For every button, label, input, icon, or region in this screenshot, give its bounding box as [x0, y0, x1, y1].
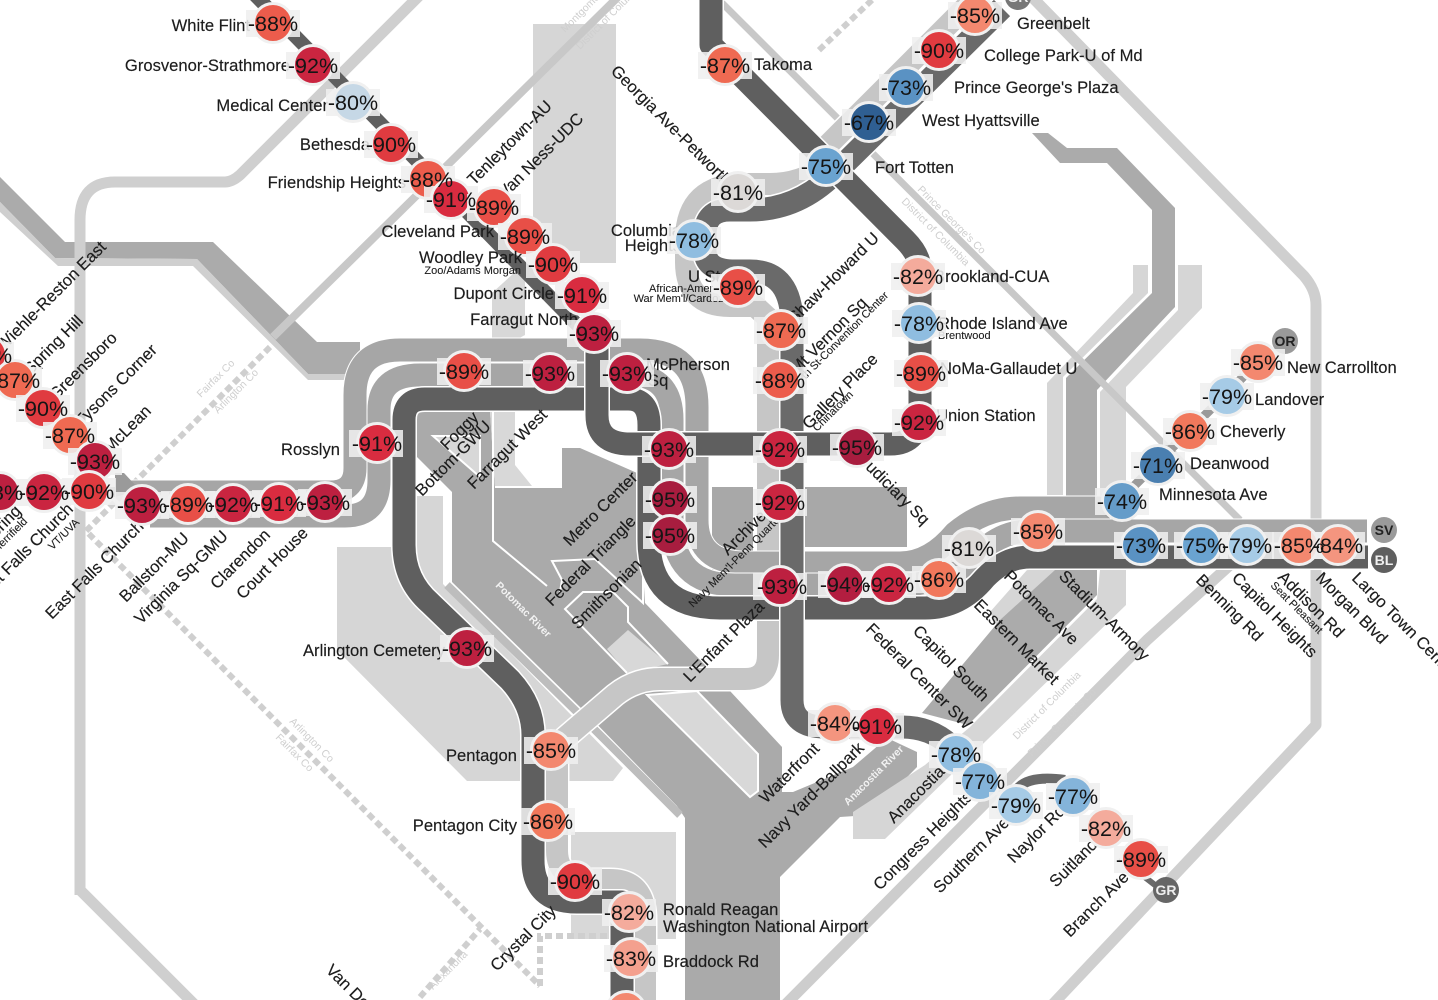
percentage change values: -84% [1313, 534, 1363, 558]
station: Pentagon City: Pentagon City [413, 816, 518, 835]
station: Naylor Rd [1003, 776, 1100, 867]
station: West Hyattsville [842, 102, 1040, 142]
station: Morgan Blvd [1272, 526, 1391, 648]
percentage change values: -90% [18, 397, 68, 421]
station: Greenbelt: Greenbelt [1017, 14, 1090, 33]
station: Mt Vernon Sq: Mt Vernon Sq [786, 293, 871, 378]
station: Congress Heights: Congress Heights [869, 787, 976, 894]
station: Landover [1200, 376, 1325, 416]
percentage change values: -67% [844, 111, 894, 135]
county and river labels: Alexandria [427, 948, 470, 992]
station: U St: War Mem'l/Cardozo [634, 293, 730, 305]
station: Capitol Heights: Capitol Heights [1228, 568, 1321, 661]
station: Archives: Navy Mem'l-Penn Quarter [687, 512, 785, 610]
line terminus badges [1005, 0, 1397, 903]
station: U St: African-Amer Civil [649, 283, 737, 295]
orange branch to New Carrollton [1105, 350, 1270, 515]
station: Union Station [892, 402, 1036, 442]
station: Prince George's Plaza [879, 68, 1119, 106]
county and river labels: Fairfax Co [273, 732, 316, 774]
station: Metro Center: Metro Center [559, 468, 642, 550]
station: Union Station: Union Station [936, 406, 1036, 425]
station: East Falls Church [41, 486, 169, 623]
station: Rosslyn: Rosslyn [281, 440, 340, 459]
station: Farragut North [470, 310, 621, 352]
percentage change values: -82% [604, 901, 654, 925]
station: Medical Center [216, 82, 380, 122]
station: Columbia Heights: Columbia [611, 221, 682, 240]
line terminus badges: BL [1375, 552, 1394, 568]
percentage change values: -87% [756, 319, 806, 343]
station: L'Enfant Plaza [679, 566, 807, 686]
station: Virginia Sq-GMU: Virginia Sq-GMU [130, 527, 232, 628]
station: Morgan Blvd: Morgan Blvd [1312, 568, 1391, 648]
station: Stadium-Armory: Stadium-Armory [1055, 566, 1154, 665]
station: Anacostia [883, 734, 983, 827]
green line [705, 8, 1155, 885]
station: Medical Center: Medical Center [216, 96, 328, 115]
percentage change values: -89% [896, 362, 946, 386]
percentage change values: -78% [669, 229, 719, 253]
percentage change values: -91% [426, 188, 476, 212]
station: Suitland [1045, 808, 1133, 891]
station: Judiciary Sq [830, 428, 934, 529]
percentage change values: -73% [1116, 534, 1166, 558]
percentage change values: -92% [288, 54, 338, 78]
station: Largo Town Center [1311, 526, 1438, 681]
station: King St [606, 992, 646, 1000]
percentage change values: -90% [64, 480, 114, 504]
station: Columbia Heights [611, 220, 721, 260]
station: Arlington Cemetery [303, 628, 494, 668]
station: Takoma [698, 46, 813, 84]
station: Greenbelt [948, 0, 1090, 34]
percentage change values: -77% [1048, 785, 1098, 809]
percentage change values: -93% [644, 438, 694, 462]
percentage change values: -85% [1233, 351, 1283, 375]
county and river labels [195, 0, 1099, 992]
percentage change values: -95% [645, 488, 695, 512]
station: Minnesota Ave: Minnesota Ave [1159, 485, 1268, 504]
station: Foggy Bottom-GWU: Bottom-GWU [411, 417, 495, 500]
station: Crystal City [486, 862, 602, 975]
station: Van Ness-UDC [467, 109, 587, 226]
percentage change values: -91% [352, 432, 402, 456]
station: Woodley Park: Woodley Park [419, 248, 523, 267]
station: L'Enfant Plaza: L'Enfant Plaza [679, 597, 769, 686]
county and river labels: Anacostia River [842, 744, 906, 808]
percentage change values: -81% [713, 181, 763, 205]
percentage change values: -87% [700, 54, 750, 78]
percentage change values: -92% [208, 493, 258, 517]
station: Potomac Ave [942, 528, 1083, 649]
station: Metro Center [559, 430, 696, 550]
station: Archives [687, 482, 807, 610]
percentage change values: -90% [914, 39, 964, 63]
station: Waterfront [755, 704, 862, 807]
station: Navy Yard-Ballpark: Navy Yard-Ballpark [754, 738, 868, 852]
station: Reagan National Airport: Ronald Reagan [663, 900, 778, 919]
station: East Falls Church: East Falls Church [41, 517, 147, 623]
percentage change values: -88% [248, 12, 298, 36]
station: McLean [68, 401, 155, 480]
station: Vienna [0, 472, 27, 563]
station: McPherson Sq [600, 354, 730, 392]
station: Smithsonian [567, 516, 697, 633]
county and river labels: District of Columbia [1011, 669, 1084, 742]
station: Rhode Island Ave: Rhode Island Ave [938, 314, 1068, 333]
percentage change values: -92% [755, 438, 805, 462]
percentage change values: -90% [528, 253, 578, 277]
line terminus badges: GR [1156, 882, 1176, 898]
station: Eastern Market: Eastern Market [970, 595, 1063, 689]
station: Gallery Place [753, 350, 882, 468]
station: Ballston-MU [115, 484, 215, 606]
percentage change values: -93% [525, 362, 575, 386]
station: Eastern Market [912, 560, 1063, 689]
station: College Park-U of Md: College Park-U of Md [984, 46, 1143, 65]
station: White Flint: White Flint [172, 16, 250, 35]
station: Capitol South: Capitol South [909, 621, 993, 705]
station: Capitol Heights [1174, 526, 1321, 661]
percentage change values: -90% [366, 133, 416, 157]
percentage change values: -87% [45, 424, 95, 448]
percentage change values: -91% [852, 715, 902, 739]
station: U St: U St [688, 267, 721, 286]
percentage change values: -85% [526, 739, 576, 763]
station: West Falls Church: VT/UVA [46, 516, 83, 553]
station: Braddock Rd [604, 938, 759, 978]
station: Greensboro: Greensboro [45, 328, 121, 404]
station: Pentagon: Pentagon [446, 746, 517, 765]
station: McLean: McLean [100, 401, 155, 457]
station: Court House: Court House [232, 524, 312, 603]
station: Foggy Bottom-GWU: Foggy [436, 407, 483, 454]
station: Federal Triangle [541, 480, 697, 610]
station: Federal Triangle: Federal Triangle [541, 512, 640, 610]
station: Southern Ave: Southern Ave [929, 813, 1013, 897]
percentage change values: -88% [755, 369, 805, 393]
station: Fort Totten: Fort Totten [875, 158, 954, 177]
percentage change values: -89% [1116, 848, 1166, 872]
station: White Flint [172, 4, 300, 42]
station: Southern Ave [929, 786, 1043, 897]
west branch stubs [0, 350, 140, 497]
station: Cleveland Park: Cleveland Park [381, 222, 495, 241]
percentage change values: -75% [1176, 534, 1226, 558]
station: Georgia Ave-Petworth: Georgia Ave-Petworth [607, 61, 735, 189]
station: Smithsonian: Smithsonian [567, 555, 645, 633]
percentage change values: -94% [820, 573, 870, 597]
station: Foggy Bottom-GWU [411, 352, 495, 500]
station: Judiciary Sq: Judiciary Sq [856, 451, 934, 529]
percentage change values: -92% [755, 491, 805, 515]
station: Friendship Heights [268, 160, 455, 198]
station: Columbia Heights: Heights [625, 236, 681, 255]
station: Brookland-CUA: Brookland-CUA [934, 267, 1050, 286]
county and river labels: Arlington Co [212, 367, 261, 416]
percentage change values: -90% [550, 870, 600, 894]
percentage change values: -89% [469, 196, 519, 220]
percentage change values: -89% [439, 360, 489, 384]
station: Spring Hill [0, 311, 87, 400]
station: Naylor Rd: Naylor Rd [1003, 801, 1069, 867]
station: NoMa-Gallaudet U [894, 354, 1077, 392]
station: Shaw-Howard U: Shaw-Howard U [784, 228, 883, 327]
station: Federal Center SW: Federal Center SW [862, 619, 976, 733]
percentage change values: -92% [864, 573, 914, 597]
percentage change values: -93% [569, 322, 619, 346]
station: Dupont Circle [453, 276, 609, 314]
percentage change values: -82% [893, 265, 943, 289]
station: Clarendon [206, 484, 306, 593]
percentage change values: -91% [557, 284, 607, 308]
percentage change values: -86% [523, 810, 573, 834]
percentage change values: -86% [1165, 420, 1215, 444]
percentage change values: -83% [606, 947, 656, 971]
percentage change values: -93% [602, 362, 652, 386]
percentage change values: -92% [894, 411, 944, 435]
percentage change values: -93% [300, 491, 350, 515]
east highway bands [853, 133, 1202, 839]
percentage change values: -71% [1133, 454, 1183, 478]
orange line [150, 375, 1367, 585]
percentage change values: -89% [713, 276, 763, 300]
station: Capitol South [862, 564, 993, 705]
station: Benning Rd: Benning Rd [1192, 570, 1267, 645]
station: Minnesota Ave [1095, 482, 1268, 520]
station: U St [634, 267, 765, 306]
percentage change values: -93% [70, 450, 120, 474]
station: Crystal City: Crystal City [486, 901, 560, 975]
percentage change values: -78% [894, 312, 944, 336]
station: Cheverly: Cheverly [1220, 422, 1286, 441]
station: Farragut West [463, 354, 577, 493]
percentage change values: -85% [1274, 534, 1324, 558]
station: Rhode Island Ave: Brentwood [938, 330, 991, 342]
station: Navy Yard-Ballpark [754, 706, 904, 852]
station: Georgia Ave-Petworth [607, 61, 765, 211]
station: New Carrollton: New Carrollton [1287, 358, 1397, 377]
station: New Carrollton [1231, 342, 1397, 382]
percentage change values: -92% [19, 481, 69, 505]
dashed jurisdiction boundaries [86, 0, 872, 997]
county and river labels: Arlington Co [287, 716, 336, 765]
station: Gallery Place: Gallery Place [798, 350, 882, 433]
percentage change values: -75% [801, 155, 851, 179]
station: McPherson Sq: McPherson [646, 355, 730, 374]
station: Spring Hill: Spring Hill [20, 311, 87, 378]
percentage change values: -74% [1097, 490, 1147, 514]
station: NoMa-Gallaudet U: NoMa-Gallaudet U [940, 359, 1077, 378]
station: Reagan National Airport [602, 892, 868, 936]
station: West Falls Church [0, 472, 116, 608]
station: Congress Heights [869, 762, 1007, 894]
silver line [130, 350, 1120, 563]
station: Deanwood [1131, 446, 1269, 484]
percentage change values: -77% [955, 770, 1005, 794]
station: Brookland-CUA [891, 256, 1050, 296]
station: Court House [232, 482, 352, 603]
percentage change values: -79% [1222, 534, 1272, 558]
station: Landover: Landover [1255, 390, 1325, 409]
station: Waterfront: Waterfront [755, 739, 823, 807]
station: Mt Vernon Sq: 7th St-Convention Center [795, 289, 891, 386]
station: Dupont Circle: Dupont Circle [453, 284, 554, 303]
station: Tenleytown-AU: Tenleytown-AU [463, 96, 556, 189]
percentage change values: -79% [1202, 385, 1252, 409]
county and river labels: Prince George's Co [1026, 686, 1099, 759]
line terminus badges: OR [1274, 333, 1296, 349]
percentage change values: -95% [832, 436, 882, 460]
station: Dunn Loring [0, 472, 71, 579]
station: Benning Rd [1114, 526, 1267, 645]
west highway band [0, 177, 360, 380]
station: Rosslyn [281, 424, 403, 462]
percentage change values: -93% [757, 575, 807, 599]
percentage change values: -89% [500, 225, 550, 249]
percentage change values: -82% [1081, 817, 1131, 841]
blue line [404, 399, 1368, 1000]
station: Pentagon City [413, 802, 575, 840]
county and river labels: Potomac River [493, 580, 553, 640]
station: Reagan National Airport: Washington National Airport [663, 917, 868, 936]
county and river labels: District of Columbia [899, 196, 972, 269]
station: College Park-U of Md [912, 30, 1143, 70]
station: Addison Rd [1220, 526, 1348, 641]
station: Van Ness-UDC: Van Ness-UDC [494, 109, 587, 202]
station: Branch Ave: Branch Ave [1059, 868, 1133, 941]
percentage change values: -84% [810, 712, 860, 736]
station: West Hyattsville: West Hyattsville [922, 111, 1040, 130]
station: Virginia Sq-GMU [130, 484, 260, 628]
county and river labels: Fairfax Co [195, 357, 237, 400]
percentage change values: -81% [944, 537, 994, 561]
percentage change values: -88% [403, 168, 453, 192]
station: Woodley Park [419, 244, 580, 284]
station: Clarendon: Clarendon [206, 525, 274, 593]
percentage change values: -73% [881, 76, 931, 100]
percentage change values: -78% [931, 743, 981, 767]
station: Mt Vernon Sq [753, 289, 891, 400]
station: Rhode Island Ave [892, 304, 1068, 342]
station: Suitland: Suitland [1045, 835, 1101, 891]
station: Anacostia: Anacostia [883, 761, 949, 827]
station: Tysons Corner [43, 340, 161, 454]
station: Tysons Corner: Tysons Corner [71, 340, 161, 430]
station: Greensboro [16, 328, 121, 428]
percentage change values: -93% [117, 494, 167, 518]
percentage change values: -85% [950, 4, 1000, 28]
station: McPherson Sq: Sq [648, 371, 668, 390]
station: Takoma: Takoma [754, 55, 813, 74]
station: Tenleytown-AU [424, 96, 556, 218]
station: Fort Totten [799, 146, 954, 186]
station: Grosvenor-Strathmore: Grosvenor-Strathmore [125, 56, 290, 75]
station: Addison Rd: Addison Rd [1274, 567, 1348, 641]
percentage change values: -95% [645, 524, 695, 548]
percentage change values: -91% [254, 492, 304, 516]
station: Friendship Heights: Friendship Heights [268, 173, 406, 192]
station: Potomac Ave: Potomac Ave [1000, 566, 1083, 649]
station: Bethesda [300, 124, 418, 164]
county and river labels: Prince George's Co [915, 184, 988, 257]
station: Archives: Archives [717, 500, 776, 559]
station: Branch Ave [1059, 840, 1168, 941]
station: Braddock Rd: Braddock Rd [663, 952, 759, 971]
station: Farragut West: Farragut West [463, 405, 551, 493]
station: Gallery Place: Chinatown [811, 389, 856, 434]
station: Arlington Cemetery: Arlington Cemetery [303, 641, 446, 660]
red line [255, 0, 920, 444]
station: Cleveland Park [381, 216, 552, 256]
percentage change values: -93% [442, 637, 492, 661]
station: Deanwood: Deanwood [1190, 454, 1269, 473]
station: Prince George's Plaza: Prince George's Plaza [954, 78, 1119, 97]
station: Pentagon [446, 730, 578, 770]
station: Ballston-MU: Ballston-MU [115, 528, 193, 606]
station: Woodley Park: Zoo/Adams Morgan [424, 265, 521, 277]
yellow line [551, 0, 978, 1000]
percentage change values: -79% [991, 794, 1041, 818]
percentage change values: -86% [914, 568, 964, 592]
station: Federal Center SW [818, 564, 976, 733]
line terminus badges: SV [1375, 522, 1394, 538]
percentage change values: -89% [163, 493, 213, 517]
station: Cheverly [1163, 412, 1286, 450]
station: Grosvenor-Strathmore [125, 46, 340, 84]
percentage change values: -85% [1013, 520, 1063, 544]
station: Bethesda: Bethesda [300, 135, 371, 154]
percentage change values: -80% [328, 91, 378, 115]
station: Stadium-Armory [1011, 512, 1154, 665]
station: Shaw-Howard U [754, 228, 883, 350]
land and water shapes [337, 24, 917, 1000]
station: Addison Rd: Seat Pleasant [1268, 580, 1325, 637]
station: Farragut North: Farragut North [470, 310, 578, 329]
